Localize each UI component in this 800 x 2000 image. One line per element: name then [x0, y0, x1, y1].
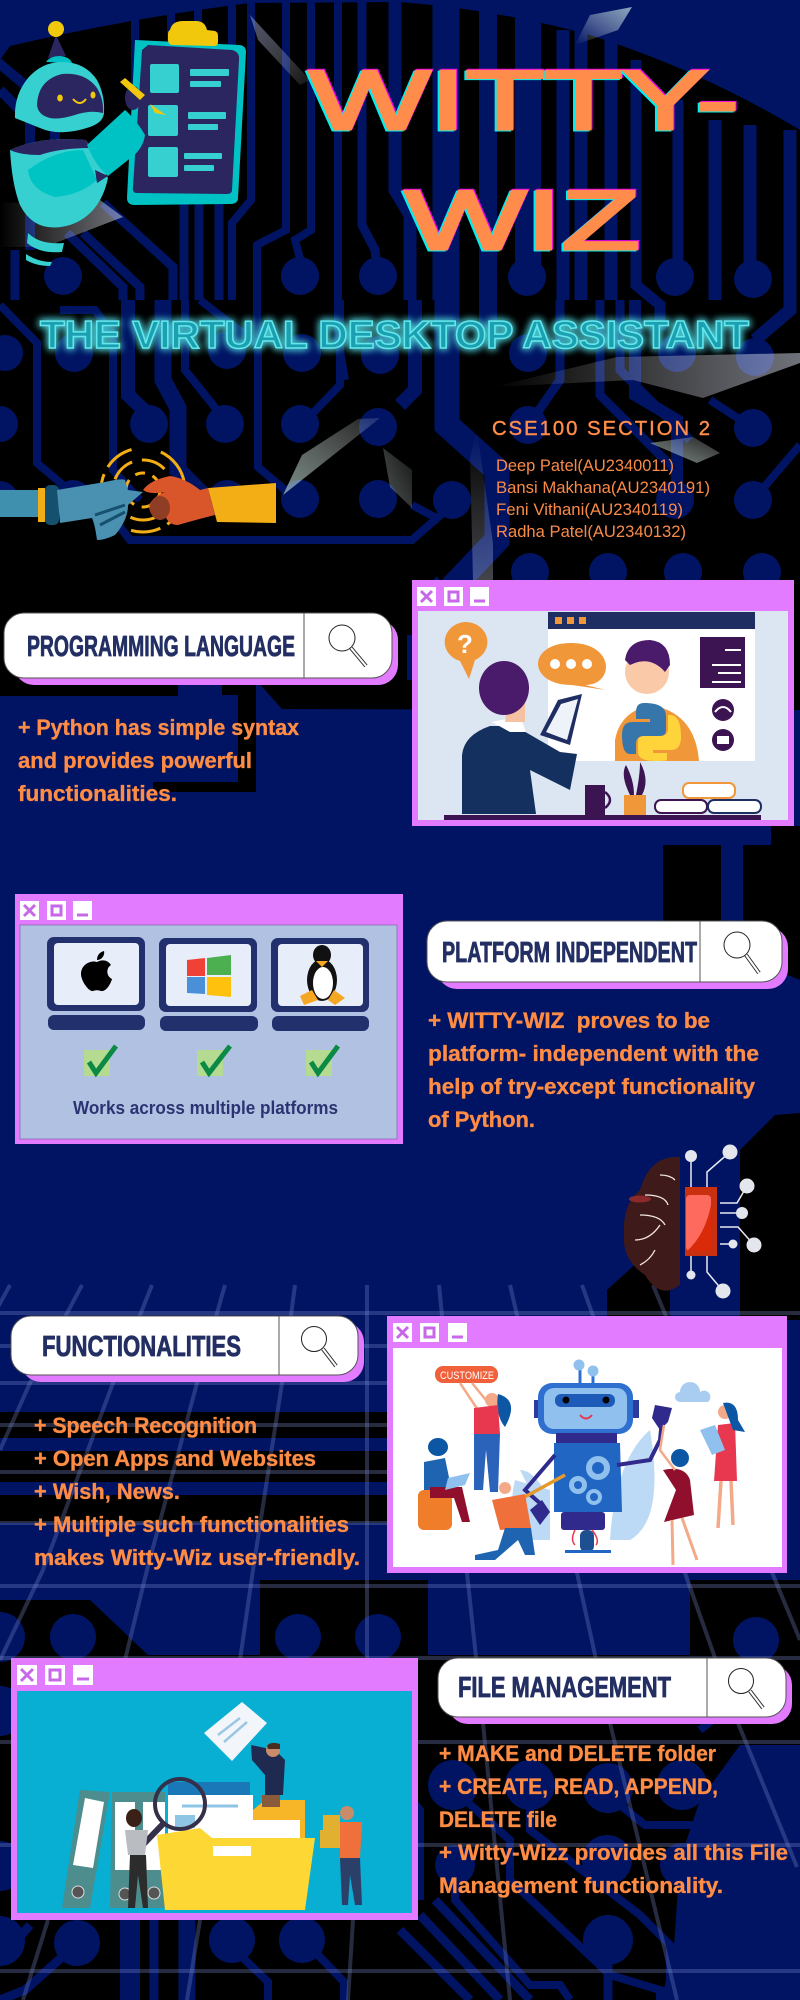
text: python: functionalities.: [18, 781, 177, 806]
upper traces: [0, 0, 800, 600]
text: functionalities list: makes Witty-Wiz user-friendly.: [34, 1545, 360, 1570]
monitor: windows: [159, 938, 258, 1031]
text: functionalities list: + Open Apps and Websites: [34, 1446, 316, 1471]
window: python developer illustration: ?: [457, 629, 473, 659]
search bar: platform independent: [427, 921, 788, 989]
text: python: [18, 715, 300, 806]
upper pads: [0, 257, 781, 591]
text: python: and provides powerful: [18, 748, 252, 773]
subtitle: THE VIRTUAL DESKTOP ASSISTANT: [40, 314, 749, 357]
text: functionalities list: + Speech Recognition: [34, 1413, 257, 1438]
heading: programming language: PROGRAMMING LANGUAGE: [27, 631, 295, 663]
icon: magnifier: [329, 625, 366, 666]
text: file management: + MAKE and DELETE folder: [439, 1741, 716, 1766]
search bar: functionalities: [11, 1316, 364, 1382]
heading: file management: FILE MANAGEMENT: [458, 1672, 671, 1704]
label: customize: [435, 1366, 498, 1383]
icon: magnifier: [724, 932, 759, 973]
monitor: apple: [47, 937, 145, 1030]
text: platform independence: of Python.: [428, 1107, 535, 1132]
window: customizable robot illustration: [387, 1316, 787, 1573]
window: python developer illustration: [412, 580, 794, 826]
perspective grid: [0, 1285, 800, 2000]
window: platform compatibility illustration: Works across multiple platforms: [73, 1098, 338, 1118]
glass shards: [0, 7, 800, 580]
text: platform independence: + WITTY-WIZ proves to be: [428, 1008, 710, 1033]
text: functionalities list: [34, 1413, 360, 1570]
icon: brain chip: [624, 1144, 762, 1298]
text: functionalities list: + Wish, News.: [34, 1479, 180, 1504]
text: file management: [439, 1741, 788, 1898]
lower pads and traces: [0, 1612, 779, 1966]
window: file management illustration: [11, 1658, 418, 1920]
search bar: file management: [438, 1658, 792, 1724]
monitor: linux: [271, 938, 369, 1031]
team names: Radha Patel(AU2340132): [496, 522, 686, 541]
text: file management: Management functionality.: [439, 1873, 723, 1898]
text: platform independence: platform- independent with the: [428, 1041, 759, 1066]
check marks: [84, 1046, 338, 1076]
course label: CSE100 SECTION 2: [492, 418, 712, 440]
heading: functionalities: FUNCTIONALITIES: [42, 1331, 241, 1363]
title: WIZ: [405, 173, 640, 267]
window: platform compatibility illustration: [15, 894, 403, 1144]
text: file management: DELETE file: [439, 1807, 557, 1832]
team names: Bansi Makhana(AU2340191): [496, 478, 710, 497]
text: file management: + Witty-Wizz provides all this File: [439, 1840, 788, 1865]
search bar: programming language: [4, 613, 398, 685]
title: [309, 53, 739, 267]
text: platform independence: help of try-except functionality: [428, 1074, 756, 1099]
label: customize: CUSTOMIZE: [440, 1370, 494, 1382]
icon: magnifier: [728, 1668, 763, 1708]
team names: [496, 456, 710, 541]
text: platform independence: [428, 1008, 759, 1132]
icon: magnifier: [302, 1326, 336, 1366]
team names: Deep Patel(AU2340011): [496, 456, 674, 475]
illustration: robot and human hands: [0, 448, 276, 540]
title: WITTY-: [309, 53, 739, 147]
text: python: + Python has simple syntax: [18, 715, 300, 740]
text: functionalities list: + Multiple such functionalities: [34, 1512, 349, 1537]
text: file management: + CREATE, READ, APPEND,: [439, 1774, 718, 1799]
icon: python logo: [622, 703, 681, 761]
illustration: robot with clipboard: [10, 21, 246, 266]
team names: Feni Vithani(AU2340119): [496, 500, 683, 519]
